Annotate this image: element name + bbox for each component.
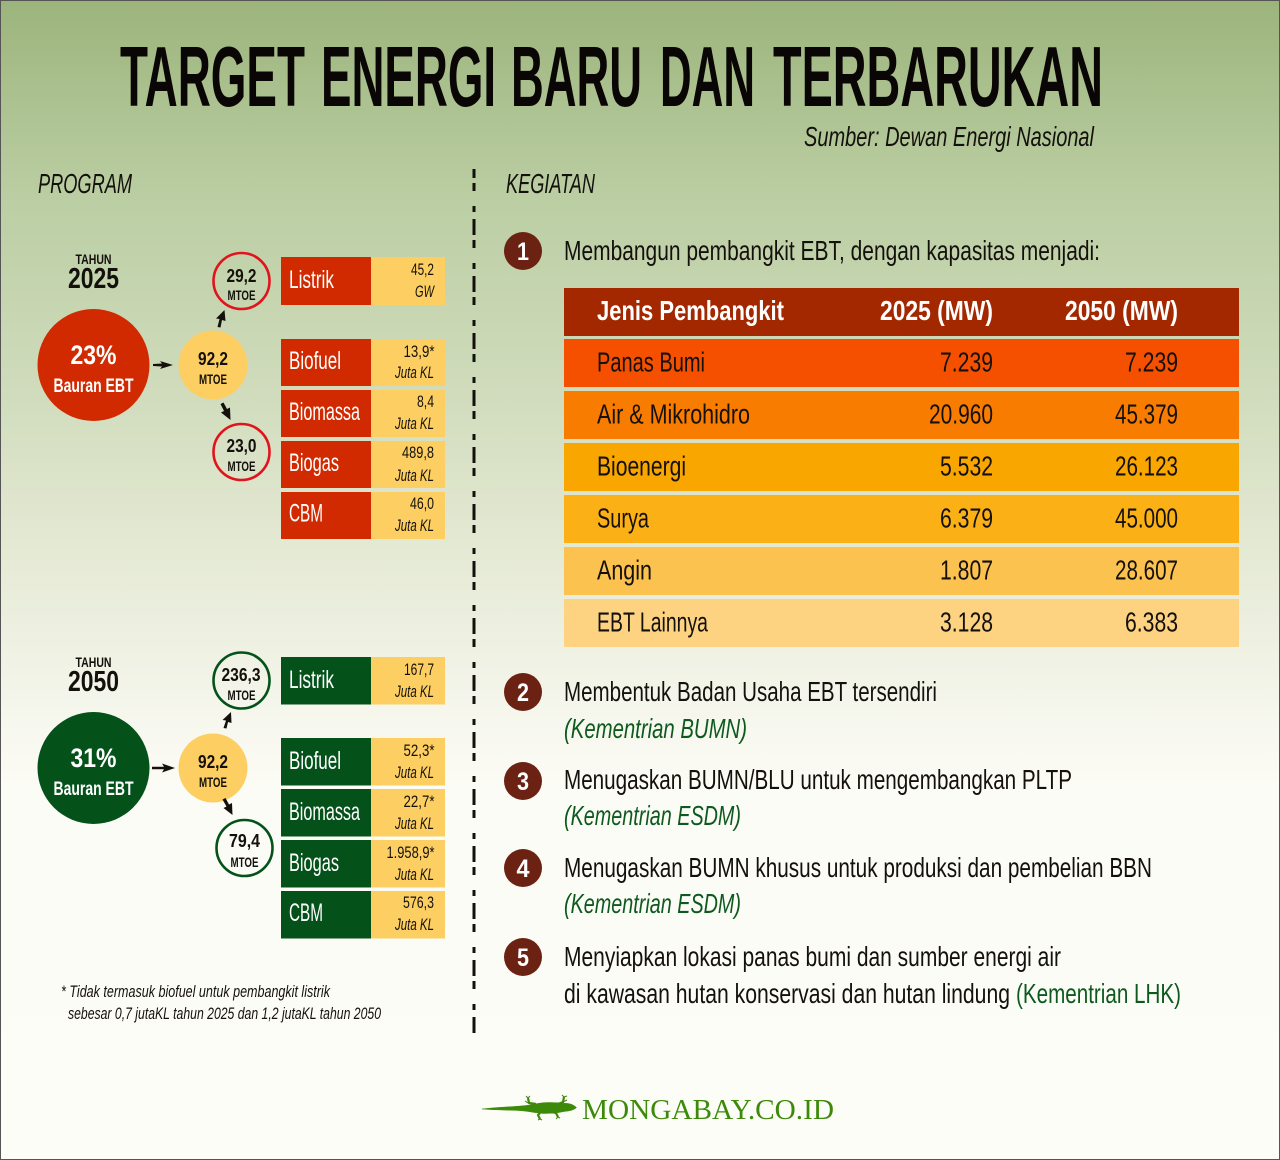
row: Biomassa [281, 789, 445, 836]
circle: 23% bauran EBT: Bauran EBT [54, 376, 134, 397]
item 2 text [564, 676, 937, 744]
row: Biofuel [281, 738, 445, 786]
item 3 text: Menugaskan BUMN/BLU untuk mengembangkan PLTP [564, 764, 1072, 795]
row: Biofuel: Juta KL [394, 363, 434, 382]
row: Biogas: 1.958,9* [386, 843, 435, 862]
ring: 79,4 MTOE: 79,4 [229, 830, 261, 851]
table row: Air & Mikrohidro: Air & Mikrohidro [597, 398, 750, 430]
year label 2025 [68, 251, 119, 295]
footnote [61, 982, 381, 1023]
capacity table [564, 288, 1239, 647]
table row: Surya [564, 495, 1239, 543]
arrow: up [222, 712, 232, 728]
item 5 text [564, 941, 1181, 1009]
table row: Air & Mikrohidro: 45.379 [1115, 398, 1178, 430]
year label 2025: 2025 [68, 263, 119, 295]
table header: Jenis Pembangkit [597, 295, 784, 326]
item 3 badge [504, 762, 542, 800]
row: Biogas [281, 840, 445, 888]
table row: Air & Mikrohidro: 20.960 [929, 398, 993, 430]
item 1 badge [504, 232, 542, 270]
row: Listrik: Listrik [289, 266, 334, 294]
row: Biogas: Juta KL [394, 466, 434, 485]
circle: 92,2 MTOE [178, 734, 248, 802]
table row: Surya: 45.000 [1115, 502, 1178, 534]
table row: Surya: Surya [597, 502, 649, 534]
table header: 2025 (MW) [880, 295, 993, 326]
row: Listrik [281, 257, 445, 305]
ring: 236,3 MTOE [214, 652, 270, 708]
title: ENERGI [321, 30, 496, 125]
table row: Panas Bumi [564, 339, 1239, 387]
item 3 text [564, 764, 1072, 831]
ring: 236,3 MTOE: 236,3 [222, 664, 260, 685]
row: CBM [281, 891, 445, 938]
table row: Angin: 1.807 [940, 554, 993, 586]
row: Biofuel: 13,9* [404, 342, 435, 361]
item 1 badge: 1 [517, 238, 529, 266]
title: BARU [511, 30, 642, 125]
row: Biomassa: Juta KL [394, 414, 434, 433]
row: Listrik: 167,7 [404, 660, 434, 679]
table row: Surya: 6.379 [940, 502, 993, 534]
row: CBM: Juta KL [394, 915, 434, 934]
year label 2050: 2050 [68, 666, 119, 698]
item 3 text: (Kementrian ESDM) [564, 800, 741, 831]
row: Biomassa [281, 390, 445, 437]
table row: Bioenergi: Bioenergi [597, 450, 686, 482]
row: Biogas: Juta KL [394, 865, 434, 884]
table row: Bioenergi [564, 443, 1239, 491]
row: Biofuel: Biofuel [289, 747, 341, 775]
table row: Angin: Angin [597, 554, 652, 586]
row: Biofuel: Juta KL [394, 763, 434, 782]
item 5 badge [504, 938, 542, 976]
item 5 text: Menyiapkan lokasi panas bumi dan sumber energi air [564, 941, 1061, 972]
source line: Sumber: Dewan Energi Nasional [804, 121, 1095, 152]
row: Biomassa: 22,7* [404, 792, 435, 811]
item 3 badge: 3 [517, 768, 529, 796]
row: Biogas: Biogas [289, 449, 339, 477]
item 2 badge: 2 [517, 679, 529, 707]
item 5 text: di kawasan hutan konservasi dan hutan lindung [564, 978, 1010, 1009]
ring: 23,0 MTOE: MTOE [228, 459, 256, 474]
panel: program 2025 [38, 251, 445, 539]
table row: Bioenergi: 26.123 [1115, 450, 1178, 482]
item 5 text: (Kementrian LHK) [1016, 978, 1181, 1009]
row: Listrik: 45,2 [411, 260, 434, 279]
ring: 79,4 MTOE [216, 820, 272, 876]
row: CBM: CBM [289, 899, 323, 927]
row: CBM: 576,3 [403, 893, 434, 912]
circle: 92,2 MTOE: MTOE [199, 372, 227, 387]
row: Biogas [281, 441, 445, 488]
ring: 29,2 MTOE: 29,2 [226, 265, 256, 286]
circle: 92,2 MTOE: MTOE [199, 775, 227, 790]
table row: Angin: 28.607 [1115, 554, 1178, 586]
row: CBM: CBM [289, 500, 323, 528]
row: CBM: 46,0 [410, 494, 434, 513]
arrow: up [216, 310, 226, 328]
year label 2050 [68, 654, 119, 698]
table row: EBT Lainnya: EBT Lainnya [597, 606, 708, 638]
title: DAN [660, 30, 755, 125]
item 4 badge: 4 [516, 855, 530, 883]
row: Listrik: Listrik [289, 666, 334, 694]
item 1 text: Membangun pembangkit EBT, dengan kapasitas menjadi: [564, 235, 1100, 266]
logo: mongabay: MONGABAY.CO.ID [582, 1094, 834, 1126]
circle: 23% bauran EBT [38, 309, 150, 421]
item 2 badge [504, 673, 542, 711]
arrow: down [220, 402, 230, 420]
year label 2050: TAHUN [76, 654, 112, 670]
panel: program 2050 [38, 652, 445, 938]
circle: 31% bauran EBT: 31% [70, 743, 116, 773]
table row: Panas Bumi: 7.239 [1125, 346, 1178, 378]
item 4 text: (Kementrian ESDM) [564, 888, 741, 919]
title [120, 30, 1103, 125]
table header: 2050 (MW) [1065, 295, 1178, 326]
ring: 23,0 MTOE: 23,0 [226, 435, 256, 456]
row: Listrik [281, 657, 445, 704]
ring: 79,4 MTOE: MTOE [230, 855, 258, 870]
ring: 29,2 MTOE: MTOE [228, 288, 256, 303]
ring: 236,3 MTOE: MTOE [228, 688, 256, 703]
heading: program: PROGRAM [38, 168, 132, 199]
row: Listrik: GW [415, 282, 435, 301]
table header [564, 288, 1239, 336]
item 5 badge: 5 [517, 944, 529, 972]
table row: Bioenergi: 5.532 [940, 450, 993, 482]
table row: EBT Lainnya [564, 599, 1239, 647]
table row: EBT Lainnya: 6.383 [1125, 606, 1178, 638]
table row: Panas Bumi: 7.239 [940, 346, 993, 378]
row: Listrik: Juta KL [394, 682, 434, 701]
item 2 text: (Kementrian BUMN) [564, 713, 747, 744]
table row: Air & Mikrohidro [564, 391, 1239, 439]
row: Biogas: 489,8 [402, 443, 434, 462]
arrow: to total [153, 361, 173, 369]
row: Biomassa: Juta KL [394, 814, 434, 833]
row: CBM: Juta KL [394, 516, 434, 535]
arrow: to total [152, 764, 175, 772]
circle: 23% bauran EBT: 23% [70, 340, 116, 370]
icon: gecko [482, 1095, 576, 1120]
circle: 92,2 MTOE [178, 330, 248, 400]
row: Biofuel: Biofuel [289, 347, 341, 375]
item 2 text: Membentuk Badan Usaha EBT tersendiri [564, 676, 937, 707]
year label 2025: TAHUN [76, 251, 112, 267]
ring: 23,0 MTOE [214, 424, 270, 480]
circle: 31% bauran EBT [38, 712, 150, 824]
row: Biofuel [281, 339, 445, 386]
circle: 92,2 MTOE: 92,2 [198, 751, 228, 772]
heading: kegiatan: KEGIATAN [506, 168, 595, 199]
circle: 92,2 MTOE: 92,2 [198, 348, 228, 369]
title: TARGET [120, 30, 305, 125]
footnote: sebesar 0,7 jutaKL tahun 2025 dan 1,2 jutaKL tahun 2050 [68, 1004, 381, 1023]
arrow: down [222, 798, 232, 815]
table row: EBT Lainnya: 3.128 [940, 606, 993, 638]
row: Biofuel: 52,3* [404, 741, 435, 760]
table row: Panas Bumi: Panas Bumi [597, 346, 705, 378]
item 4 text [564, 852, 1152, 919]
footnote: * Tidak termasuk biofuel untuk pembangkit listrik [61, 982, 331, 1001]
circle: 31% bauran EBT: Bauran EBT [54, 779, 134, 800]
ring: 29,2 MTOE [214, 253, 270, 309]
table row: Angin [564, 547, 1239, 595]
row: Biogas: Biogas [289, 849, 339, 877]
item 4 badge [504, 849, 542, 887]
row: Biomassa: Biomassa [289, 398, 360, 426]
row: Biomassa: Biomassa [289, 798, 360, 826]
row: Biomassa: 8,4 [417, 392, 434, 411]
row: CBM [281, 492, 445, 539]
